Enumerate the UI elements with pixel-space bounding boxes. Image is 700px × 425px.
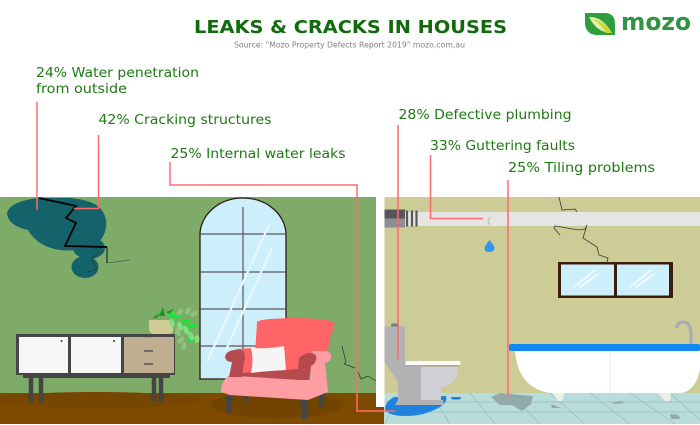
window: arched bbox=[200, 198, 286, 379]
floor tile damage bbox=[491, 393, 681, 419]
panel: right room bbox=[384, 197, 700, 424]
label: internal water leaks: 25% Internal water leaks bbox=[170, 147, 346, 162]
sideboard bbox=[16, 334, 175, 402]
bathtub bbox=[509, 322, 700, 401]
title: LEAKS & CRACKS IN HOUSES bbox=[194, 17, 507, 38]
water puddle bbox=[385, 396, 461, 416]
logo: mozo: mozo bbox=[621, 8, 691, 36]
callout lines bbox=[37, 102, 508, 411]
label: tiling problems: 25% Tiling problems bbox=[508, 161, 655, 176]
logo: mozo bbox=[585, 8, 691, 36]
toilet bbox=[384, 324, 460, 405]
water stain bbox=[7, 198, 106, 278]
source line: Source: "Mozo Property Defects Report 2019" mozo,com,au bbox=[234, 40, 465, 50]
label: cracking structures: 42% Cracking structures bbox=[98, 113, 272, 128]
plant bbox=[149, 306, 200, 350]
bathroom window bbox=[558, 262, 673, 298]
label: guttering faults: 33% Guttering faults bbox=[430, 139, 575, 154]
label: from outside: from outside bbox=[36, 82, 127, 97]
water drop bbox=[484, 240, 494, 252]
label: defective plumbing: 28% Defective plumbing bbox=[398, 108, 572, 123]
wall divider bbox=[376, 197, 384, 407]
rug shadow bbox=[210, 392, 344, 418]
crack: lower wall bbox=[342, 346, 376, 381]
gutter pipe bbox=[384, 210, 700, 228]
label: water penetration: 24% Water penetration bbox=[36, 66, 199, 81]
cracks: upper wall bbox=[554, 197, 608, 262]
armchair bbox=[221, 318, 334, 419]
panel: left room bbox=[0, 197, 385, 424]
crack: wall bbox=[39, 198, 130, 272]
tiled floor bbox=[384, 393, 700, 424]
